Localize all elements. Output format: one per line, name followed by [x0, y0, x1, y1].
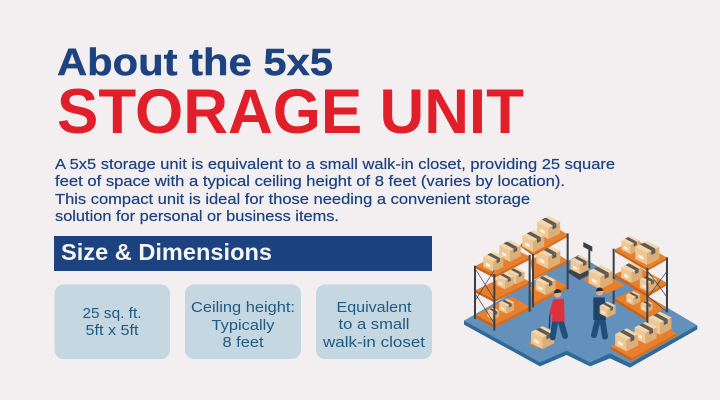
intro paragraph: A 5x5 storage unit is equivalent to a small walk-in closet, providing 25 square [55, 157, 615, 173]
hand truck with box [567, 242, 592, 280]
intro paragraph: This compact unit is ideal for those needing a convenient storage [55, 192, 530, 208]
section heading: Size & Dimensions: Size & Dimensions [61, 239, 272, 265]
title: STORAGE UNIT: STORAGE UNIT [57, 77, 524, 147]
card: equivalent closet: to a small [338, 317, 410, 333]
card: equivalent closet: walk-in closet [322, 335, 425, 351]
title: About the 5x5: About the 5x5 [57, 42, 333, 84]
card: ceiling height: 8 feet [222, 335, 264, 351]
card: 25 sq. ft.: 5ft x 5ft [86, 323, 138, 339]
card: equivalent closet [316, 284, 432, 359]
worker in red with pallet jack [528, 289, 565, 349]
card: ceiling height [185, 284, 301, 359]
card: 25 sq. ft. [54, 284, 170, 359]
warehouse illustration [464, 216, 697, 368]
card: ceiling height: Ceiling height: [191, 300, 295, 316]
card: equivalent closet: Equivalent [336, 300, 412, 316]
intro paragraph: solution for personal or business items. [55, 209, 339, 225]
floor [464, 255, 697, 368]
middle shelf unit [521, 216, 569, 307]
card: ceiling height: Typically [212, 318, 275, 334]
intro paragraph [55, 157, 615, 225]
center pallet with boxes [583, 265, 625, 294]
right shelf unit [613, 236, 668, 323]
left shelf unit [474, 240, 531, 331]
bottom right pallet with boxes [611, 312, 677, 361]
section heading: Size & Dimensions [54, 236, 432, 271]
card: 25 sq. ft.: 25 sq. ft. [82, 306, 142, 322]
intro paragraph: feet of space with a typical ceiling height of 8 feet (varies by location). [55, 174, 565, 190]
worker in navy carrying box [593, 287, 616, 337]
